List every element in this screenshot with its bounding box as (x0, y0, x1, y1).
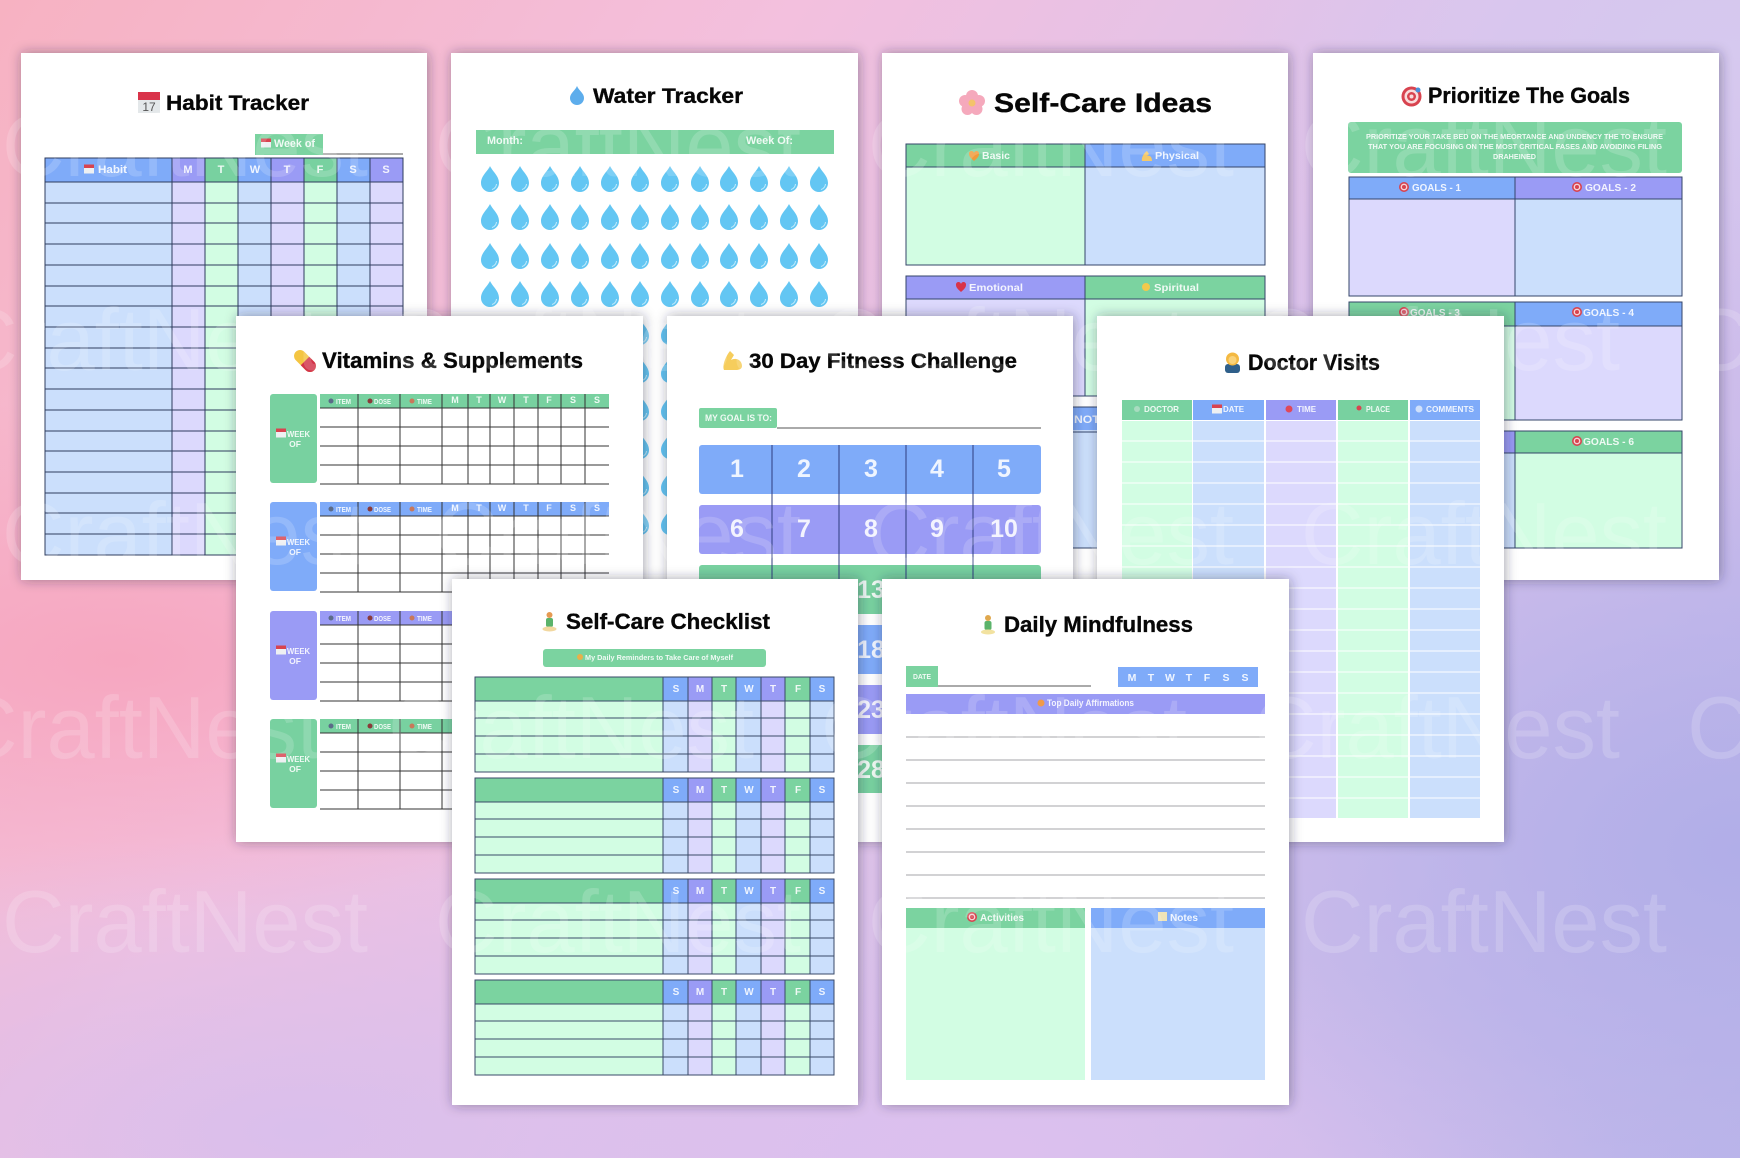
weekday box: M (1128, 672, 1137, 684)
vitamin week block 1 (270, 394, 609, 484)
heading: vitamins and supplements: Vitamins & Supplements (322, 348, 583, 373)
icon: calendar: 17 (142, 100, 156, 114)
watermark overlay: CraftNest (1301, 484, 1667, 583)
vitamin week block 1: F (546, 395, 552, 405)
tag: week of: Week of (274, 138, 315, 150)
day grid: 9 (930, 515, 944, 543)
month and week bar: Month: (487, 135, 523, 147)
checklist table 4: T (721, 987, 727, 998)
vitamin week block 3 (270, 611, 609, 701)
activities box: Activities (980, 912, 1024, 924)
goals table: 1 and 2 (1349, 177, 1682, 296)
checklist table 1 (475, 677, 834, 772)
watermark overlay: CraftNest (1301, 872, 1667, 971)
watermark overlay: CraftNest (868, 96, 1234, 195)
day grid: 8 (864, 515, 878, 543)
goals table: 1 and 2: GOALS - 1 (1412, 182, 1461, 194)
intro text box (1348, 122, 1682, 173)
checklist table 3 (475, 879, 834, 974)
habit table: M (183, 164, 193, 176)
day grid: 23 (857, 696, 885, 724)
vitamin week block 4: WEEK (287, 754, 311, 764)
checklist table 4: M (696, 987, 704, 998)
checklist table 4: W (744, 987, 754, 998)
panel: self-care checklist (452, 579, 858, 1105)
icon: target (1402, 86, 1422, 106)
vitamin week block 2: ITEM (336, 505, 351, 514)
doctor table: DATE (1223, 404, 1244, 414)
vitamin week block 2: WEEK (287, 537, 311, 547)
activities box (906, 908, 1085, 1080)
intro text box: THAT YOU ARE FOCUSING ON THE MOST CRITICAL FASES AND AVOIDING FILING (1368, 144, 1663, 151)
vitamin week block 3: ITEM (336, 614, 351, 623)
heading: doctor visits: Doctor Visits (1248, 350, 1380, 375)
affirmations bar: Top Daily Affirmations (1047, 698, 1134, 708)
ideas table: basic and physical: Physical (1155, 150, 1199, 162)
goals table: 3 and 4: GOALS - 3 (1410, 307, 1460, 319)
vitamin week block 2 (270, 502, 609, 592)
watermark overlay: CraftNest (2, 872, 368, 971)
vitamin week block 1: T (523, 395, 529, 405)
ideas table: emotional and spiritual (906, 276, 1265, 396)
checklist table 1: T (721, 684, 727, 695)
vitamin week block 2: S (570, 503, 576, 513)
checklist table 1: T (770, 684, 776, 695)
checklist table 2: W (744, 785, 754, 796)
vitamin week block 4: TIME (417, 722, 432, 731)
watermark overlay: CraftNest (2, 96, 368, 195)
vitamin week block 4: OF (289, 764, 301, 774)
checklist table 3: S (673, 886, 680, 897)
vitamin week block 1: M (451, 395, 459, 405)
weekday box: T (1148, 672, 1155, 684)
panel: water tracker (451, 53, 858, 580)
goals table: 5 and 6 (1349, 431, 1682, 548)
checklist table 4: S (673, 987, 680, 998)
heading: water tracker: Water Tracker (593, 85, 743, 108)
watermark overlay (0, 96, 1740, 971)
notes box (1091, 908, 1265, 1080)
ideas table: notes (906, 407, 1265, 548)
reminders banner (543, 649, 766, 667)
habit table: T (218, 164, 225, 176)
panel: doctor visits (1097, 316, 1504, 842)
panel: daily mindfulness (882, 579, 1289, 1105)
checklist table 4 (475, 980, 834, 1075)
icon: meditating person (542, 612, 556, 632)
vitamin week block 4: DOSE (374, 722, 391, 731)
notes box: Notes (1170, 912, 1198, 924)
heading: daily mindfulness: Daily Mindfulness (1004, 612, 1193, 637)
doctor table: DOCTOR (1144, 404, 1179, 414)
watermark overlay: CraftNest (435, 872, 801, 971)
weekday box: F (1204, 672, 1211, 684)
weekday box: W (1165, 672, 1175, 684)
habit table: Habit (98, 164, 127, 176)
icon: blossom (959, 90, 985, 115)
day grid: 3 (864, 455, 878, 483)
watermark overlay: CraftNest (435, 484, 801, 583)
vitamin week block 2: OF (289, 547, 301, 557)
affirmations bar (906, 694, 1265, 714)
vitamin week block 4: ITEM (336, 722, 351, 731)
checklist table 1: M (696, 684, 704, 695)
heading: prioritize the goals: Prioritize The Goals (1428, 83, 1630, 108)
reminders banner: My Daily Reminders to Take Care of Myself (585, 655, 734, 662)
day grid: 7 (797, 515, 811, 543)
icon: calendar (138, 92, 160, 114)
ideas table: notes: NOTES (1074, 414, 1116, 426)
checklist table 2: M (696, 785, 704, 796)
checklist table 1: F (795, 684, 801, 695)
checklist table 3: M (696, 886, 704, 897)
checklist table 3: T (770, 886, 776, 897)
checklist table 4: F (795, 987, 801, 998)
habit table: W (250, 164, 261, 176)
doctor table (1122, 400, 1480, 818)
vitamin week block 3: WEEK (287, 646, 311, 656)
habit table: F (317, 164, 324, 176)
vitamin week block 1: WEEK (287, 429, 311, 439)
day grid: 13 (857, 576, 885, 604)
checklist table 4: T (770, 987, 776, 998)
vitamin week block 2: DOSE (374, 505, 391, 514)
water drop grid (481, 166, 828, 535)
watermark overlay: CraftNest (388, 290, 754, 389)
month and week bar: Week Of: (746, 135, 793, 147)
day grid: 18 (857, 636, 885, 664)
doctor table: COMMENTS (1426, 404, 1474, 414)
checklist table 2: T (770, 785, 776, 796)
panel: prioritize the goals (1313, 53, 1719, 580)
vitamin week block 1: TIME (417, 397, 432, 406)
ideas table: emotional and spiritual: Emotional (969, 282, 1023, 294)
ideas table: basic and physical: Basic (982, 150, 1010, 162)
vitamin week block 1: OF (289, 439, 301, 449)
watermark overlay: CraftNest (1301, 96, 1667, 195)
ideas table: emotional and spiritual: Spiritual (1154, 282, 1199, 294)
checklist table 2: T (721, 785, 727, 796)
checklist table 2: F (795, 785, 801, 796)
watermark overlay: CraftNest (821, 290, 1187, 389)
checklist table 2 (475, 778, 834, 873)
tag: week of (255, 134, 323, 155)
watermark overlay: CraftNest (2, 484, 368, 583)
day grid (699, 445, 1041, 793)
doctor table: TIME (1297, 404, 1316, 414)
checklist table 3: T (721, 886, 727, 897)
panel: habit tracker (21, 53, 427, 580)
ideas table: basic and physical (906, 144, 1265, 265)
checklist table 3: F (795, 886, 801, 897)
date tag (906, 666, 938, 687)
habit table (45, 158, 403, 555)
day grid: 6 (730, 515, 744, 543)
habit table: T (284, 164, 291, 176)
panel: 30 day fitness challenge (667, 316, 1073, 842)
watermark overlay: CraftNest (1254, 678, 1620, 777)
watermark overlay: CraftNest (435, 96, 801, 195)
habit table: S (349, 164, 357, 176)
vitamin week block 2: M (451, 503, 459, 513)
intro text box: DRAHEINED (1493, 154, 1536, 161)
vitamin week block 4 (270, 719, 609, 809)
watermark overlay: CraftNest (388, 678, 754, 777)
vitamin week block 1: DOSE (374, 397, 391, 406)
checklist table 1: S (819, 684, 826, 695)
checklist table 3: S (819, 886, 826, 897)
checklist table 4: S (819, 987, 826, 998)
watermark overlay: CraftNest (821, 678, 1187, 777)
vitamin week block 2: T (523, 503, 529, 513)
vitamin week block 1: S (570, 395, 576, 405)
icon: meditating person (981, 615, 995, 634)
watermark overlay: CraftNest (1254, 290, 1620, 389)
day grid: 1 (730, 455, 744, 483)
goals table: 5 and 6: GOALS - 5 (1410, 436, 1460, 448)
goals table: 1 and 2: GOALS - 2 (1585, 182, 1636, 194)
goal tag: MY GOAL IS TO: (705, 413, 772, 423)
heading: habit tracker: Habit Tracker (166, 92, 309, 115)
checklist table 2: S (819, 785, 826, 796)
vitamin week block 1: W (498, 395, 507, 405)
doctor table: PLACE (1366, 404, 1390, 414)
weekday box: S (1222, 672, 1230, 684)
icon: doctor (1225, 352, 1240, 373)
day grid: 4 (930, 455, 944, 483)
icon: water drop (570, 86, 584, 105)
watermark overlay: CraftNest (868, 872, 1234, 971)
habit table: S (382, 164, 390, 176)
panel: vitamins and supplements (236, 316, 643, 842)
date tag: DATE (913, 672, 931, 681)
vitamin week block 3: OF (289, 656, 301, 666)
vitamin week block 1: T (476, 395, 482, 405)
goals table: 3 and 4 (1349, 302, 1682, 420)
goals table: 3 and 4: GOALS - 4 (1583, 307, 1634, 319)
vitamin week block 2: S (594, 503, 600, 513)
checklist table 2: S (673, 785, 680, 796)
icon: flexed arm (723, 351, 742, 370)
heading: self-care checklist: Self-Care Checklist (566, 609, 771, 634)
vitamin week block 2: W (498, 503, 507, 513)
vitamin week block 1: ITEM (336, 397, 351, 406)
goals table: 5 and 6: GOALS - 6 (1583, 436, 1634, 448)
icon: pill (292, 348, 318, 374)
weekday box: T (1186, 672, 1193, 684)
heading: 30 day fitness challenge: 30 Day Fitness Challenge (749, 350, 1017, 373)
checklist table 3: W (744, 886, 754, 897)
vitamin week block 2: F (546, 503, 552, 513)
intro text box: PRIORITIZE YOUR TAKE BED ON THE MEORTANCE AND UNDENCY THE TO ENSURE (1366, 134, 1663, 141)
heading: self-care ideas: Self-Care Ideas (994, 88, 1212, 118)
day grid: 2 (797, 455, 811, 483)
checklist table 1: S (673, 684, 680, 695)
checklist table 1: W (744, 684, 754, 695)
day grid: 10 (990, 515, 1018, 543)
month and week bar (476, 130, 834, 154)
panel: self-care ideas (882, 53, 1288, 580)
weekday box: S (1241, 672, 1249, 684)
goal tag (699, 408, 777, 428)
weekday box (1118, 667, 1258, 687)
vitamin week block 3: TIME (417, 614, 432, 623)
vitamin week block 1: S (594, 395, 600, 405)
day grid: 28 (857, 756, 885, 784)
watermark overlay: CraftNest (868, 484, 1234, 583)
vitamin week block 2: TIME (417, 505, 432, 514)
vitamin week block 2: T (476, 503, 482, 513)
vitamin week block 3: DOSE (374, 614, 391, 623)
day grid: 5 (997, 455, 1011, 483)
